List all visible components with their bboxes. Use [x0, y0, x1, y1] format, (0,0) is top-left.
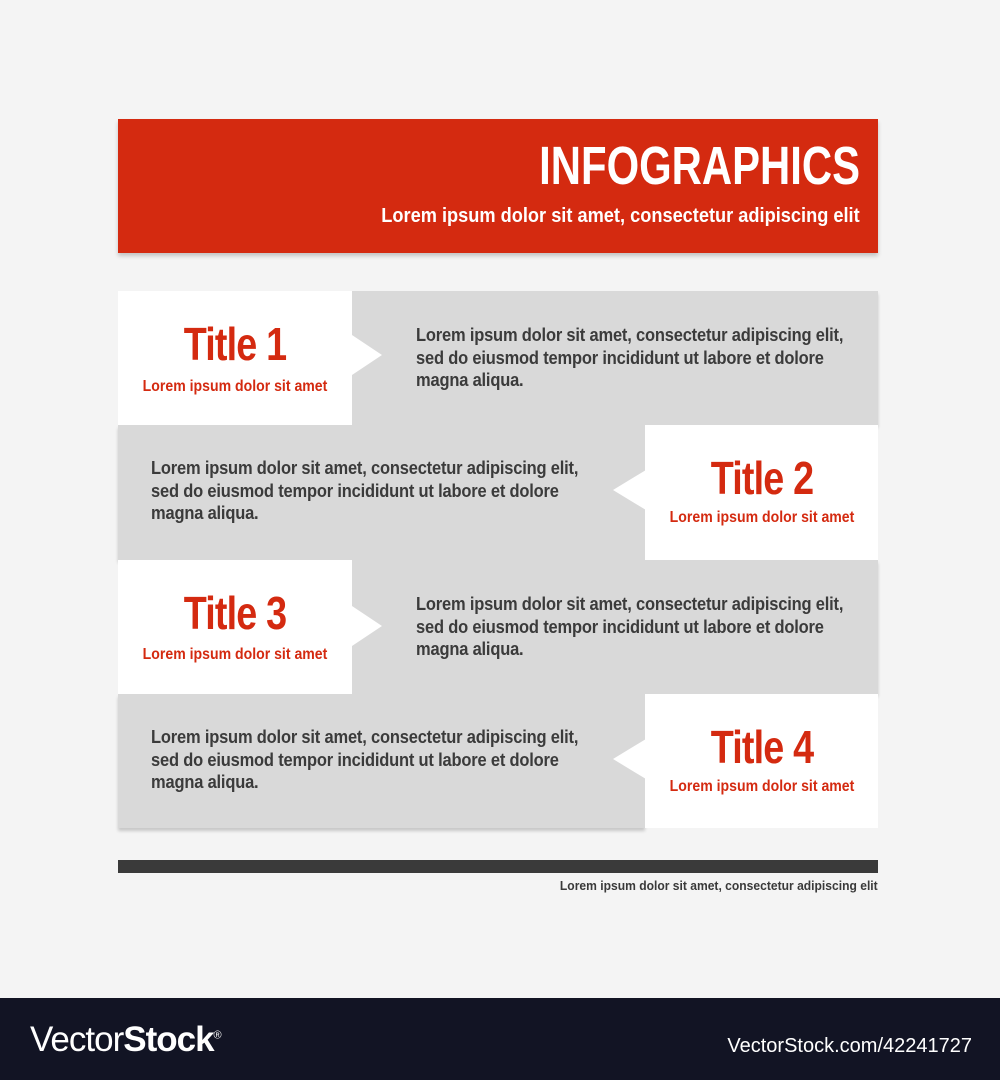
subtitle 4: Lorem ipsum dolor sit amet: [670, 778, 854, 795]
arrow 4: [613, 740, 645, 778]
text 4: Lorem ipsum dolor sit amet, consectetur adipiscing elit,: [151, 727, 578, 747]
title 1: Title 1: [184, 318, 286, 370]
brand logo: VectorStock®: [30, 1020, 221, 1059]
arrow 3: [352, 606, 382, 646]
text 4: [151, 727, 578, 792]
title: INFOGRAPHICS: [539, 136, 860, 196]
subtitle 3: Lorem ipsum dolor sit amet: [143, 646, 327, 663]
text 1: sed do eiusmod tempor incididunt ut labore et dolore: [416, 348, 824, 368]
text 3: Lorem ipsum dolor sit amet, consectetur adipiscing elit,: [416, 594, 843, 614]
bottom brand band: [0, 998, 1000, 1080]
row 4: [116, 694, 878, 832]
subtitle: Lorem ipsum dolor sit amet, consectetur adipiscing elit: [382, 205, 860, 227]
footer text: Lorem ipsum dolor sit amet, consectetur adipiscing elit: [560, 878, 878, 893]
text 4: sed do eiusmod tempor incididunt ut labore et dolore: [151, 750, 559, 770]
text 4: magna aliqua.: [151, 772, 258, 792]
title 4: Title 4: [711, 721, 813, 773]
row 1: [118, 291, 880, 428]
arrow 2: [613, 470, 645, 510]
text 2: magna aliqua.: [151, 503, 258, 523]
subtitle 1: Lorem ipsum dolor sit amet: [143, 378, 327, 395]
row 3: [118, 560, 880, 697]
text 1: [416, 325, 843, 390]
text 3: sed do eiusmod tempor incididunt ut labore et dolore: [416, 616, 824, 636]
brand url: VectorStock.com/42241727: [727, 1035, 972, 1057]
text 1: Lorem ipsum dolor sit amet, consectetur adipiscing elit,: [416, 325, 843, 345]
header banner: [118, 119, 878, 253]
arrow 1: [352, 335, 382, 375]
text 1: magna aliqua.: [416, 370, 523, 390]
row 2: [116, 425, 878, 563]
title 3: Title 3: [184, 587, 286, 639]
text 2: Lorem ipsum dolor sit amet, consectetur adipiscing elit,: [151, 458, 578, 478]
text 3: magna aliqua.: [416, 639, 523, 659]
footer bar: [118, 860, 878, 873]
text 3: [416, 594, 843, 659]
subtitle 2: Lorem ipsum dolor sit amet: [670, 509, 854, 526]
text 2: sed do eiusmod tempor incididunt ut labore et dolore: [151, 480, 559, 500]
title 2: Title 2: [711, 452, 813, 504]
text 2: [151, 458, 578, 523]
